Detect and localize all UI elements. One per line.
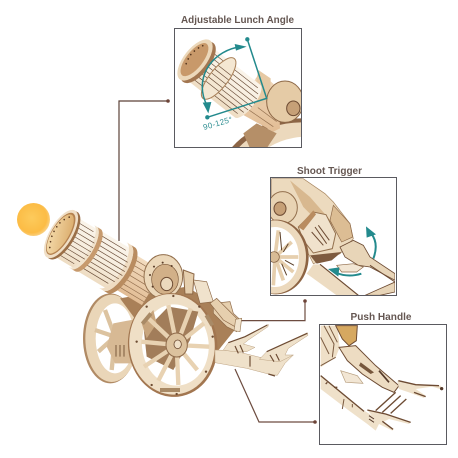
leader line: push handle	[235, 369, 317, 424]
heading: push handle: Push Handle	[350, 311, 412, 323]
carriage close-up	[268, 179, 395, 295]
handles close-up	[321, 326, 443, 431]
wheel close-up	[232, 118, 301, 147]
teal rotation arrows	[328, 226, 376, 277]
panel: push handle	[320, 324, 446, 444]
leader line: lunch angle	[119, 99, 170, 241]
carriage body	[120, 270, 240, 357]
spoked wheel close-up	[271, 220, 309, 294]
leader line: shoot trigger	[241, 299, 307, 321]
front wheel	[123, 289, 223, 401]
main cannon illustration	[37, 205, 308, 401]
barrel	[37, 205, 166, 312]
panel: adjustable lunch angle	[174, 28, 302, 148]
breech hub	[144, 255, 183, 299]
heading: shoot trigger: Shoot Trigger	[297, 165, 362, 177]
rear wheel	[83, 293, 143, 383]
panel: shoot trigger	[270, 177, 397, 296]
angle label: 90-125°	[202, 115, 233, 132]
teal angle arc and arms	[202, 37, 267, 119]
icon: yellow ball	[17, 203, 50, 236]
trail and push handles	[210, 298, 308, 376]
heading: adjustable lunch angle: Adjustable Lunch Angle	[181, 14, 294, 26]
barrel close-up	[177, 39, 301, 132]
